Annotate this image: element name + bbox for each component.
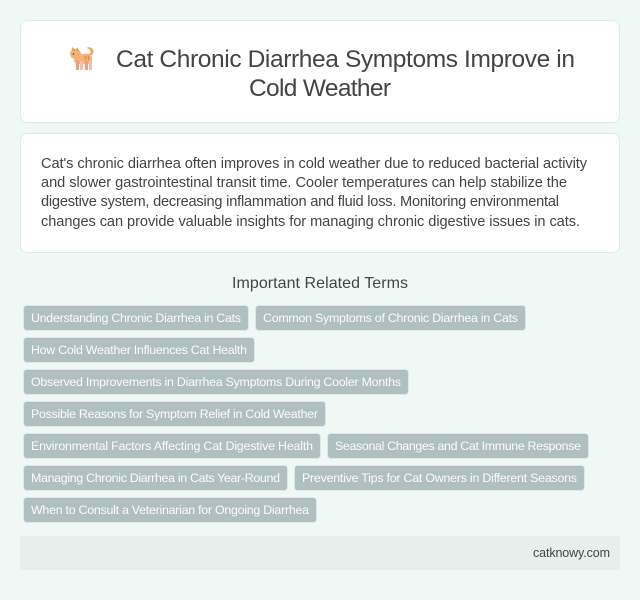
tag: Common Symptoms of Chronic Diarrhea in Cats	[263, 311, 518, 325]
tag: Observed Improvements in Diarrhea Symptoms During Cooler Months	[31, 375, 401, 389]
summary text	[41, 156, 588, 230]
tag: Seasonal Changes and Cat Immune Response	[335, 439, 581, 453]
tag	[24, 402, 326, 426]
tag: When to Consult a Veterinarian for Ongoing Diarrhea	[31, 503, 309, 517]
footer source text: catknowy.com	[533, 546, 610, 560]
related term tags	[24, 306, 588, 522]
footer	[20, 536, 620, 570]
tag	[24, 434, 320, 458]
tag	[24, 466, 288, 490]
tag: Environmental Factors Affecting Cat Digestive Health	[31, 439, 313, 453]
heading: related terms: Important Related Terms	[232, 275, 408, 292]
panel: summary	[20, 134, 620, 252]
tag	[24, 498, 316, 522]
tag	[24, 370, 408, 394]
tag: Preventive Tips for Cat Owners in Different Seasons	[302, 471, 577, 485]
summary text: and slower gastrointestinal transit time. Cooler temperatures can help stabilize the	[41, 175, 567, 191]
tag: Understanding Chronic Diarrhea in Cats	[31, 311, 241, 325]
title	[116, 46, 575, 102]
tag: Managing Chronic Diarrhea in Cats Year-Round	[31, 471, 280, 485]
tag	[24, 306, 248, 330]
summary text: Cat's chronic diarrhea often improves in cold weather due to reduced bacterial activity	[41, 156, 588, 172]
tag: How Cold Weather Influences Cat Health	[31, 343, 247, 357]
title: Cat Chronic Diarrhea Symptoms Improve in	[116, 46, 575, 73]
icon: cat	[70, 47, 94, 70]
summary text: changes can provide valuable insights for managing chronic digestive issues in cats.	[41, 214, 580, 230]
tag: Possible Reasons for Symptom Relief in Cold Weather	[31, 407, 318, 421]
title: Cold Weather	[249, 75, 391, 102]
tag	[294, 466, 584, 490]
summary text: digestive system, decreasing inflammation and fluid loss. Monitoring environmental	[41, 194, 559, 210]
tag	[256, 306, 526, 330]
panel: title card	[20, 20, 620, 122]
tag	[328, 434, 588, 458]
tag	[24, 338, 254, 362]
